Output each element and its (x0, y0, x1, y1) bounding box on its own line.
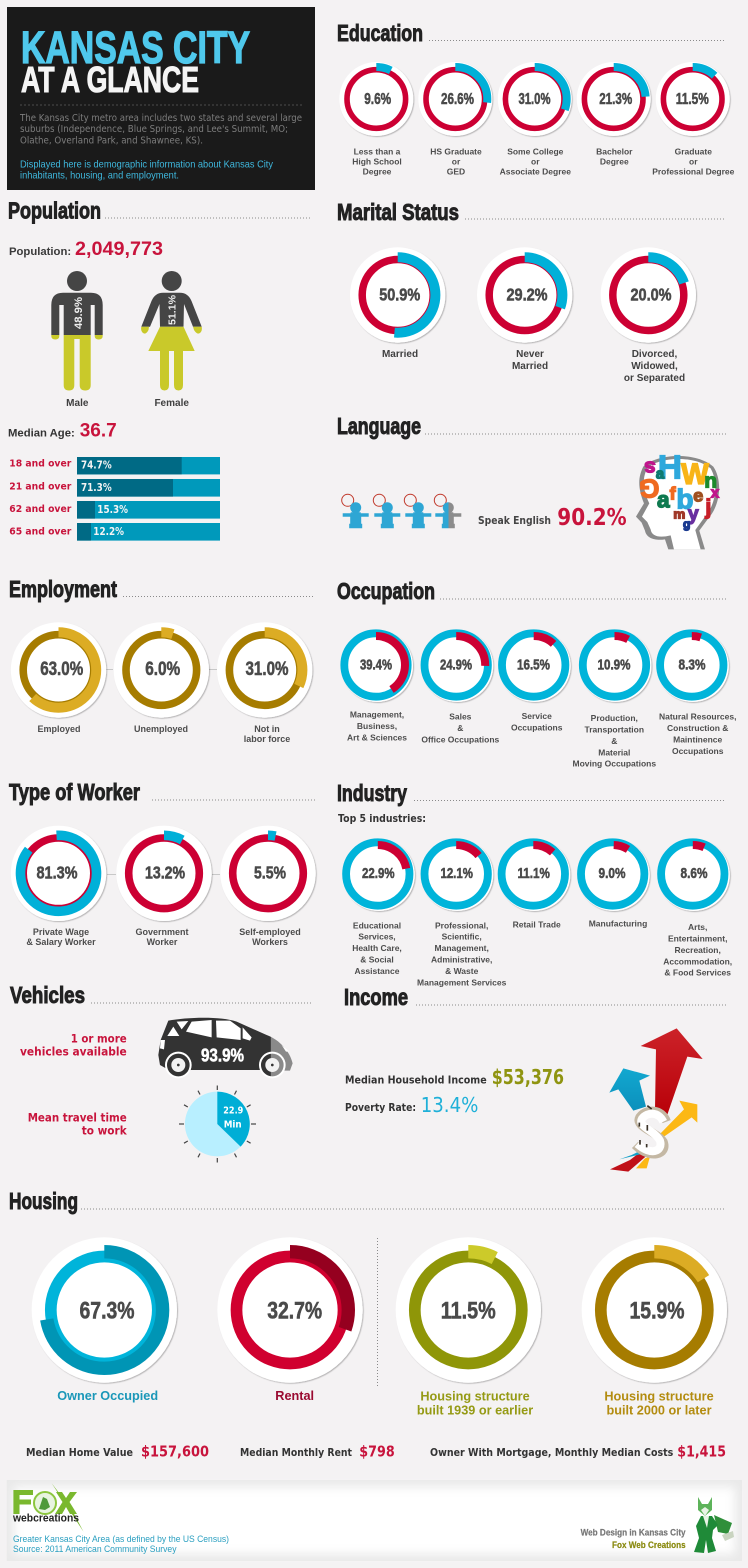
ring: arts and entertainment (658, 839, 732, 978)
ring: production: 10.9% (598, 658, 631, 674)
icon: dollar sign with arrows (609, 1028, 703, 1172)
median age (8, 420, 117, 442)
ring: educational services: Educational (353, 920, 401, 930)
heading: industry: Industry (337, 780, 407, 806)
icon: head with letters: x (711, 485, 720, 501)
ring: arts and entertainment: 8.6% (680, 866, 708, 882)
ring: production: Moving Occupations (573, 759, 656, 769)
heading: education: Education (337, 20, 423, 46)
ring: married (350, 247, 445, 360)
ring: not in labor force: Not in (254, 724, 280, 734)
bar: 18 and over (9, 457, 220, 474)
ring: government worker: Worker (147, 937, 178, 947)
ring: rental (217, 1237, 363, 1403)
ring: professional services: Professional, (435, 920, 488, 930)
ring: arts and entertainment: Entertainment, (668, 934, 727, 944)
icon: female figure: 51.1% (166, 294, 178, 325)
ring: management (341, 630, 413, 742)
bar: 18 and over: 18 and over (9, 459, 71, 470)
ring: arts and entertainment: & Food Services (664, 968, 731, 978)
heading: income: Income (344, 984, 408, 1010)
heading: marital status: Marital Status (337, 199, 459, 225)
bar: 65 and over: 12.2% (93, 526, 124, 538)
credit text: Fox Web Creations (612, 1540, 686, 1551)
ring: unemployed (114, 622, 209, 734)
ring: production: & (611, 736, 617, 746)
ring: retail trade: Retail Trade (513, 920, 561, 930)
ring: rental: 32.7% (267, 1298, 322, 1324)
ring: management: Management, (350, 710, 404, 720)
panel: occupation (337, 578, 736, 769)
ring: private wage: & Salary Worker (26, 937, 96, 947)
icon: head with letters: m (673, 506, 685, 521)
ring: some college: Associate Degree (500, 166, 571, 176)
stat: median home value (26, 1442, 209, 1460)
subtitle: AT A GLANCE (21, 59, 199, 100)
ring: natural resources: Natural Resources, (659, 712, 736, 722)
median household income (345, 1065, 564, 1089)
ring: professional services: Management, (435, 943, 489, 953)
ring: graduate degree: 11.5% (676, 91, 709, 108)
median age: Median Age: (8, 428, 75, 440)
icon: speaking people (342, 494, 461, 528)
intro highlight text (20, 158, 274, 182)
heading: population: Population (8, 198, 101, 224)
ring: management: 39.4% (360, 658, 392, 674)
ring: sales: Office Occupations (421, 734, 500, 744)
pie: mean travel time: 22.9 (223, 1106, 243, 1117)
vehicles label: vehicles available (20, 1045, 127, 1059)
ring: sales: Sales (449, 712, 472, 722)
panel: population (8, 198, 312, 541)
icon: head with letters: b (676, 483, 694, 514)
ring: rental: Rental (275, 1389, 314, 1403)
ring: sales: 24.9% (440, 658, 472, 674)
ring: not in labor force: labor force (244, 734, 290, 744)
bar: 62 and over: 62 and over (9, 504, 71, 515)
panel: marital status (337, 199, 725, 384)
ring: hs graduate: 26.6% (441, 91, 474, 108)
ring: natural resources: Maintinence (673, 734, 723, 744)
bar: 21 and over: 71.3% (81, 482, 112, 494)
speak english stat (478, 505, 627, 531)
ring: retail trade (498, 839, 570, 930)
population count (9, 238, 163, 260)
bar: 21 and over: 21 and over (9, 481, 71, 492)
travel time label: to work (82, 1124, 127, 1138)
title: KANSAS CITY (21, 22, 250, 73)
intro text: The Kansas City metro area includes two states and several large (19, 113, 302, 124)
ring: some college: 31.0% (518, 91, 551, 108)
ring: less than high school: Less than a (354, 146, 401, 156)
panel: income (344, 984, 727, 1172)
bar: 62 and over: 15.3% (97, 504, 128, 516)
icon: female figure (141, 271, 202, 409)
ring: natural resources (657, 630, 736, 756)
icon: car with 93.9% (158, 1018, 293, 1078)
ring: manufacturing: Manufacturing (589, 918, 647, 928)
ring: service (499, 630, 571, 732)
ring: bachelor degree: 21.3% (599, 91, 632, 108)
ring: built 1939 or earlier: 11.5% (441, 1298, 496, 1324)
ring: divorced, widowed, separated: 20.0% (630, 284, 672, 304)
icon: head with letters: W (681, 458, 709, 491)
ring: arts and entertainment: Accommodation, (663, 956, 732, 966)
ring: never married: Never (516, 349, 544, 360)
ring: natural resources: 8.3% (678, 658, 706, 674)
ring: professional services: 12.1% (440, 866, 473, 882)
ring: sales (421, 630, 500, 744)
ring: never married (477, 247, 572, 372)
poverty rate: 13.4% (421, 1093, 478, 1117)
heading: language: Language (337, 413, 421, 439)
median household income: $53,376 (492, 1065, 564, 1089)
travel time label (28, 1111, 127, 1138)
ring: private wage: Private Wage (33, 927, 89, 937)
ring: some college: Some College (507, 146, 564, 156)
ring: graduate degree: Professional Degree (652, 166, 735, 176)
travel time label: Mean travel time (28, 1111, 127, 1125)
ring: employed (11, 622, 106, 734)
subheading: top 5 industries: Top 5 industries: (338, 813, 426, 825)
stat: owner with mortgage: Owner With Mortgage, Monthly Median Costs (430, 1447, 673, 1459)
ring: divorced, widowed, separated: Widowed, (631, 361, 678, 372)
logo: fox webcreations (12, 1483, 84, 1532)
panel: education (337, 20, 735, 176)
icon: head with letters: G (639, 473, 659, 503)
ring: professional services: Management Services (417, 977, 507, 987)
ring: production: Production, (591, 713, 638, 723)
ring: built 1939 or earlier: Housing structure (420, 1390, 530, 1404)
panel: industry (337, 780, 732, 987)
ring: service: Service (522, 711, 552, 721)
ring: hs graduate: GED (447, 166, 465, 176)
icon: head with letters: a (657, 486, 670, 512)
ring: divorced, widowed, separated (601, 247, 696, 384)
ring: self-employed: Workers (252, 937, 288, 947)
heading: occupation: Occupation (337, 578, 435, 604)
ring: built 2000 or later: 15.9% (630, 1298, 684, 1324)
icon: head with letters: y (688, 504, 699, 525)
ring: educational services (343, 839, 415, 976)
ring: less than high school: Degree (363, 166, 392, 176)
ring: educational services: & Social (360, 954, 394, 964)
icon: head with letters: e (693, 486, 703, 506)
pie: mean travel time (179, 1086, 256, 1162)
bar: 62 and over (9, 501, 220, 519)
icon: head with letters: g (683, 517, 690, 531)
ring: bachelor degree: Degree (600, 156, 629, 166)
ring: manufacturing (578, 839, 650, 928)
ring: built 2000 or later (582, 1237, 727, 1418)
ring: arts and entertainment: Recreation, (675, 945, 721, 955)
icon: car with 93.9%: 93.9% (201, 1046, 244, 1066)
ring: arts and entertainment: Arts, (688, 922, 707, 932)
bar: 65 and over (9, 523, 220, 541)
source note (13, 1534, 229, 1554)
ring: private wage: 81.3% (36, 863, 78, 883)
ring: graduate degree (652, 62, 735, 176)
panel: housing (9, 1188, 727, 1460)
icon: head with letters: H (658, 450, 682, 487)
logo: fox webcreations: webcreations (12, 1513, 79, 1525)
ring: production: Material (598, 747, 630, 757)
ring: professional services (417, 839, 507, 987)
ring: unemployed: 6.0% (145, 659, 180, 680)
population count: 2,049,773 (75, 238, 163, 260)
icon: head with letters: f (670, 483, 677, 503)
icon: fox mascot (694, 1497, 734, 1553)
ring: divorced, widowed, separated: Divorced, (632, 349, 678, 360)
ring: hs graduate: HS Graduate (430, 146, 482, 156)
ring: educational services: Assistance (355, 966, 400, 976)
source note: Greater Kansas City Area (as defined by the US Census) (13, 1534, 229, 1544)
icon: male figure (51, 271, 103, 409)
icon: head with letters (636, 450, 720, 549)
ring: government worker: Government (135, 927, 189, 937)
ring: service: Occupations (511, 722, 563, 732)
ring: owner occupied: Owner Occupied (57, 1389, 158, 1403)
stat: median monthly rent (240, 1442, 395, 1460)
ring: retail trade: 11.1% (517, 866, 550, 882)
ring: manufacturing: 9.0% (598, 866, 626, 882)
ring: educational services: 22.9% (362, 866, 395, 882)
bar: 65 and over: 65 and over (9, 526, 71, 537)
stat: median monthly rent: Median Monthly Rent (240, 1447, 352, 1459)
vehicles label (20, 1032, 127, 1059)
pie: mean travel time: Min (224, 1119, 242, 1130)
ring: unemployed: Unemployed (134, 724, 188, 734)
heading: type of worker: Type of Worker (9, 779, 140, 805)
ring: natural resources: Construction & (667, 723, 728, 733)
intro text: suburbs (Independence, Blue Springs, and Lee's Summit, MO; (20, 124, 288, 135)
panel: employment (9, 576, 315, 744)
stat: median monthly rent: $798 (359, 1442, 395, 1460)
ring: service: 16.5% (517, 658, 550, 674)
ring: built 1939 or earlier (396, 1237, 541, 1418)
panel: vehicles (10, 982, 313, 1162)
ring: owner occupied (32, 1237, 177, 1403)
ring: some college (498, 62, 572, 176)
bar: 18 and over: 74.7% (81, 460, 112, 472)
ring: professional services: & Waste (445, 966, 479, 976)
ring: some college: or (531, 156, 540, 166)
ring: less than high school (339, 62, 413, 176)
bar chart: age groups (9, 457, 220, 541)
ring: never married: Married (512, 361, 548, 372)
ring: bachelor degree (577, 62, 651, 166)
ring: not in labor force: 31.0% (246, 659, 289, 680)
intro text (19, 113, 302, 146)
ring: less than high school: High School (352, 156, 402, 166)
poverty rate: Poverty Rate: (345, 1102, 416, 1114)
ring: self-employed: Self-employed (239, 927, 301, 937)
icon: head with letters: a (656, 466, 665, 482)
speak english stat: Speak English (478, 515, 551, 527)
intro highlight text: Displayed here is demographic information about Kansas City (20, 158, 274, 170)
ring: not in labor force (217, 622, 312, 744)
stat: median home value: Median Home Value (26, 1447, 133, 1459)
ring: management: Business, (357, 721, 397, 731)
ring: built 2000 or later: Housing structure (604, 1390, 714, 1404)
stat: owner with mortgage (430, 1442, 726, 1460)
median age: 36.7 (80, 420, 117, 442)
panel: footer (7, 1480, 742, 1561)
panel: title (7, 7, 315, 190)
heading: employment: Employment (9, 576, 117, 602)
ring: graduate degree: Graduate (675, 146, 712, 156)
population count: Population: (9, 246, 71, 258)
icon: male figure: Male (66, 398, 89, 409)
ring: government worker (116, 826, 212, 947)
ring: educational services: Services, (358, 932, 396, 942)
panel: language (337, 413, 726, 549)
ring: professional services: Administrative, (431, 954, 492, 964)
credit text (581, 1528, 686, 1551)
ring: self-employed (220, 826, 316, 947)
speak english stat: 90.2% (557, 505, 627, 531)
ring: never married: 29.2% (506, 284, 548, 304)
intro highlight text: inhabitants, housing, and employment. (20, 170, 179, 182)
ring: married: Married (382, 349, 418, 360)
ring: built 1939 or earlier: built 1939 or earlier (417, 1404, 533, 1418)
icon: male figure: 48.9% (73, 297, 85, 329)
ring: self-employed: 5.5% (254, 863, 286, 883)
ring: private wage (11, 826, 106, 947)
intro text: Olathe, Overland Park, and Shawnee, KS). (20, 136, 203, 146)
ring: divorced, widowed, separated: or Separated (624, 373, 685, 384)
ring: married: 50.9% (379, 284, 421, 304)
ring: professional services: Scientific, (442, 932, 482, 942)
heading: vehicles: Vehicles (10, 982, 85, 1008)
ring: management: Art & Sciences (347, 732, 407, 742)
icon: head with letters: n (704, 469, 717, 492)
ring: natural resources: Occupations (672, 746, 724, 756)
bar: 21 and over (9, 479, 220, 497)
ring: employed: 63.0% (40, 659, 83, 680)
icon: head with letters: j (704, 495, 711, 519)
ring: less than high school: 9.6% (364, 91, 391, 108)
heading: housing: Housing (9, 1188, 78, 1214)
icon: female figure: Female (154, 398, 189, 409)
ring: hs graduate (418, 62, 492, 176)
median household income: Median Household Income (345, 1074, 487, 1086)
ring: owner occupied: 67.3% (80, 1298, 134, 1324)
ring: employed: Employed (37, 724, 81, 734)
source note: Source: 2011 American Community Survey (13, 1544, 177, 1554)
stat: owner with mortgage: $1,415 (677, 1442, 726, 1460)
icon: head with letters: s (644, 456, 656, 479)
ring: sales: & (457, 723, 463, 733)
vehicles label: 1 or more (71, 1032, 127, 1046)
ring: bachelor degree: Bachelor (596, 146, 633, 156)
ring: graduate degree: or (689, 156, 698, 166)
ring: hs graduate: or (452, 156, 461, 166)
stat: median home value: $157,600 (141, 1442, 209, 1460)
ring: built 2000 or later: built 2000 or later (606, 1404, 712, 1418)
poverty rate (345, 1093, 478, 1117)
ring: government worker: 13.2% (145, 863, 185, 883)
ring: production: Transportation (585, 724, 644, 734)
credit text: Web Design in Kansas City (581, 1528, 686, 1539)
panel: type of worker (9, 779, 316, 947)
ring: production (573, 630, 656, 769)
ring: educational services: Health Care, (352, 943, 402, 953)
